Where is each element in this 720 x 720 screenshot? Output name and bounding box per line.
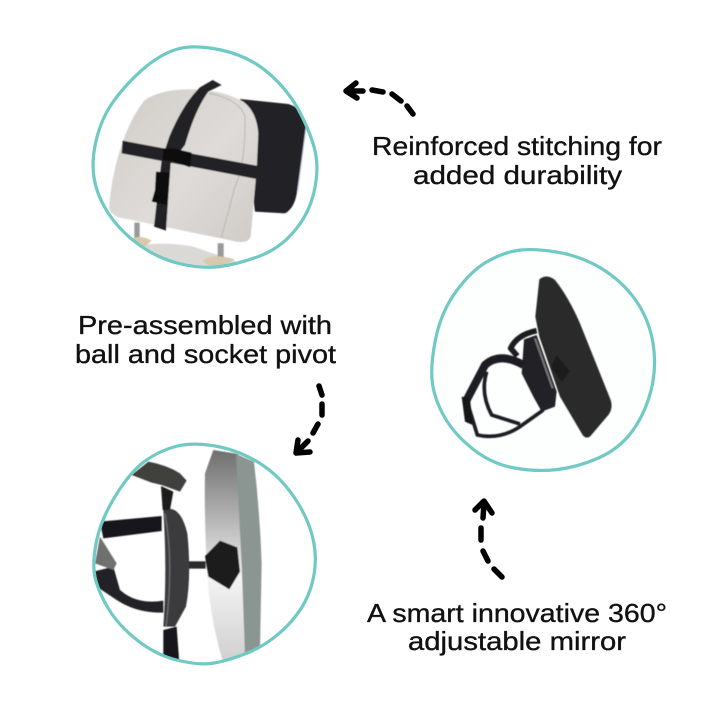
text: 360 adjustable mirror: adjustable mirror bbox=[408, 626, 626, 656]
straps bbox=[511, 331, 537, 356]
text: reinforced stitching bbox=[372, 131, 662, 190]
seat and posts bbox=[142, 244, 237, 283]
headrest cushion bbox=[109, 89, 258, 242]
top strap bbox=[132, 462, 187, 492]
ball joint bbox=[552, 356, 570, 381]
arrow: to headrest photo bbox=[346, 83, 413, 114]
arrow: to mirror side photo bbox=[475, 501, 502, 577]
horizontal strap bbox=[122, 141, 258, 179]
panel: headrest mount photo bbox=[93, 47, 317, 283]
text: ball and socket pivot: Pre-assembled with bbox=[78, 310, 332, 340]
arrow: to pivot photo bbox=[296, 386, 322, 453]
vertical strap bbox=[154, 80, 222, 231]
bracket bbox=[163, 509, 189, 627]
mirror plate bbox=[535, 276, 612, 438]
buckles bbox=[163, 148, 192, 167]
mirror edge highlight bbox=[298, 128, 306, 192]
lower strap bbox=[163, 627, 179, 663]
socket cone bbox=[205, 541, 240, 589]
text: ball and socket pivot bbox=[75, 310, 337, 369]
mirror face bbox=[205, 450, 247, 663]
stitching bbox=[210, 93, 245, 237]
text: reinforced stitching: Reinforced stitching for bbox=[372, 131, 662, 161]
mirror back behind headrest bbox=[240, 99, 306, 213]
panel: ball and socket photo bbox=[92, 442, 317, 666]
strap pad bbox=[522, 335, 557, 412]
stem bbox=[182, 561, 206, 569]
mirror edge bbox=[236, 454, 262, 655]
text: reinforced stitching: added durability bbox=[413, 160, 622, 190]
text: 360 adjustable mirror: A smart innovative 360° bbox=[367, 598, 667, 628]
side straps bbox=[100, 516, 162, 538]
panel: mirror side photo bbox=[430, 248, 656, 472]
text: ball and socket pivot: ball and socket pivot bbox=[75, 339, 337, 369]
text: 360 adjustable mirror bbox=[367, 598, 667, 656]
